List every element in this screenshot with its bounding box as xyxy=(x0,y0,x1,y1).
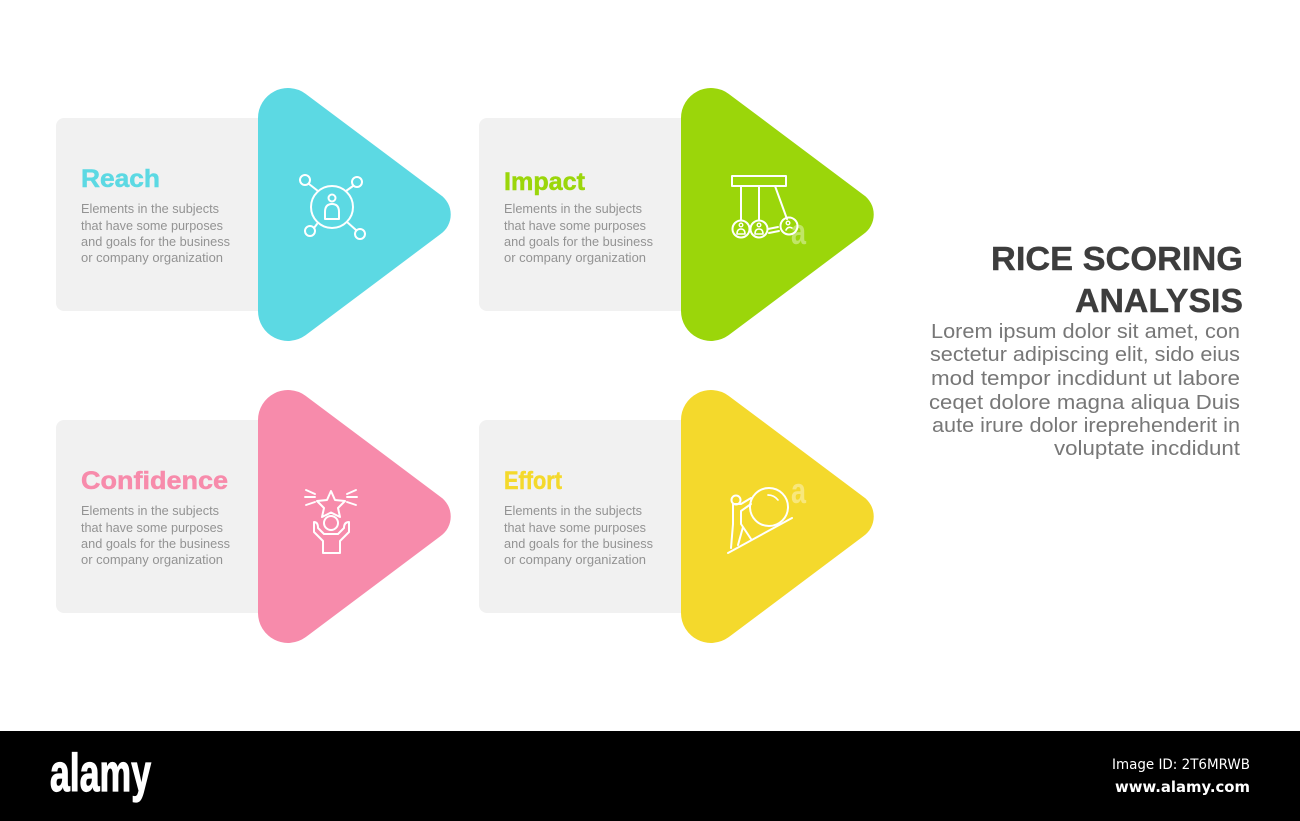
watermark glyph: a xyxy=(791,470,807,511)
title xyxy=(991,241,1243,320)
confidence description: and goals for the business xyxy=(81,537,230,551)
reach description: or company organization xyxy=(81,251,223,265)
impact description: and goals for the business xyxy=(504,235,653,249)
reach card xyxy=(56,118,271,311)
title: RICE SCORING xyxy=(991,241,1243,278)
watermark glyph: a xyxy=(791,211,807,252)
confidence description: or company organization xyxy=(81,553,223,567)
icon: figure pushing boulder xyxy=(728,488,792,553)
effort description: or company organization xyxy=(504,553,646,567)
title: ANALYSIS xyxy=(1075,283,1243,320)
effort triangle xyxy=(681,390,874,643)
effort description xyxy=(504,504,653,567)
panel: reach xyxy=(56,88,451,341)
panel: confidence xyxy=(56,390,451,643)
effort description: and goals for the business xyxy=(504,537,653,551)
effort card xyxy=(479,420,694,613)
alamy logo: alamy xyxy=(50,744,151,803)
icon: person holding star xyxy=(305,490,357,553)
image id: Image ID: 2T6MRWB xyxy=(1112,757,1250,773)
reach description: Elements in the subjects xyxy=(81,202,219,216)
icon: person network xyxy=(300,175,365,239)
reach heading: Reach xyxy=(81,165,160,193)
intro paragraph: sectetur adipiscing elit, sido eius xyxy=(930,343,1240,366)
reach description: that have some purposes xyxy=(81,219,223,233)
impact description: that have some purposes xyxy=(504,219,646,233)
intro paragraph: aute irure dolor ireprehenderit in xyxy=(932,414,1240,437)
footer bar xyxy=(0,731,1300,821)
confidence heading: Confidence xyxy=(81,467,228,495)
intro paragraph: voluptate incdidunt xyxy=(1054,437,1240,460)
intro paragraph: ceqet dolore magna aliqua Duis xyxy=(929,391,1240,414)
confidence description xyxy=(81,504,230,567)
reach triangle xyxy=(258,88,451,341)
intro paragraph: mod tempor incdidunt ut labore xyxy=(931,367,1240,390)
impact triangle xyxy=(681,88,874,341)
confidence description: that have some purposes xyxy=(81,521,223,535)
panel: effort xyxy=(479,390,874,643)
confidence description: Elements in the subjects xyxy=(81,504,219,518)
confidence triangle xyxy=(258,390,451,643)
icon: newton cradle xyxy=(732,176,798,238)
panel: impact xyxy=(479,88,874,341)
effort heading: Effort xyxy=(504,467,563,495)
impact card xyxy=(479,118,694,311)
confidence card xyxy=(56,420,271,613)
reach description xyxy=(81,202,230,265)
website: www.alamy.com xyxy=(1115,778,1250,796)
impact description: or company organization xyxy=(504,251,646,265)
reach description: and goals for the business xyxy=(81,235,230,249)
impact heading: Impact xyxy=(504,168,586,196)
intro paragraph xyxy=(929,320,1240,460)
impact description: Elements in the subjects xyxy=(504,202,642,216)
effort description: that have some purposes xyxy=(504,521,646,535)
intro paragraph: Lorem ipsum dolor sit amet, con xyxy=(931,320,1240,343)
impact description xyxy=(504,202,653,265)
effort description: Elements in the subjects xyxy=(504,504,642,518)
